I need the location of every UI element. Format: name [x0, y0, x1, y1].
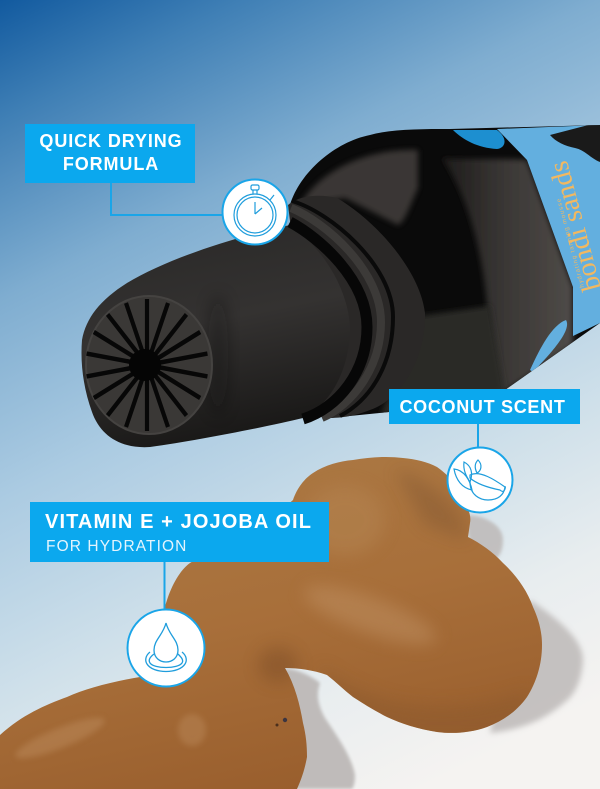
lower grey: [380, 306, 505, 416]
blob lower shade: [329, 676, 526, 733]
lower blue swoosh: [530, 320, 567, 372]
dark logo patch: [550, 122, 600, 162]
top blue swoosh: [453, 130, 505, 149]
collar ring outer: [292, 201, 393, 416]
callout: quick drying formula: FORMULA: [63, 154, 159, 174]
label box: [389, 389, 580, 424]
dark neck: [258, 647, 298, 683]
connector line: [164, 562, 166, 612]
bottle label text: hydrating tanning mousse: [556, 197, 586, 288]
collar: [288, 196, 425, 418]
left lobe sheen 2: [178, 714, 206, 746]
label box: [30, 502, 329, 562]
label box: [25, 124, 195, 183]
icon: coconut: [448, 448, 512, 512]
nozzle: [81, 225, 350, 447]
connector line: [111, 183, 224, 215]
left lobe sheen: [16, 718, 104, 758]
blob sheen: [308, 585, 434, 646]
blob darker fold: [402, 475, 464, 536]
shoulder reflection top: [300, 150, 418, 225]
callout: quick drying formula: [25, 124, 288, 244]
cast shadows on surface: [280, 515, 583, 789]
icon: water drop: [128, 610, 204, 686]
callout: coconut scent: [389, 389, 580, 512]
icon: stopwatch: [222, 180, 288, 244]
nozzle rim shading: [208, 295, 228, 415]
collar ring middle: [291, 208, 381, 418]
tan mousse blob: [0, 457, 542, 789]
bottle label: [497, 125, 600, 336]
bottle: [81, 120, 600, 447]
label text: COCONUT SCENT: [399, 397, 566, 417]
connector line: [477, 424, 479, 448]
callout: vitamin e + jojoba oil: [30, 502, 329, 686]
bottle body: [280, 120, 600, 420]
blob upper lobe highlight: [326, 494, 376, 548]
label text: QUICK DRYING: [39, 131, 183, 151]
label text: VITAMIN E + JOJOBA OIL: [45, 511, 312, 533]
shoulder grey sheen: [442, 158, 573, 392]
collar ring inner: [290, 222, 367, 419]
nozzle tip face: [86, 296, 212, 434]
label subtext: FOR HYDRATION: [46, 538, 187, 555]
